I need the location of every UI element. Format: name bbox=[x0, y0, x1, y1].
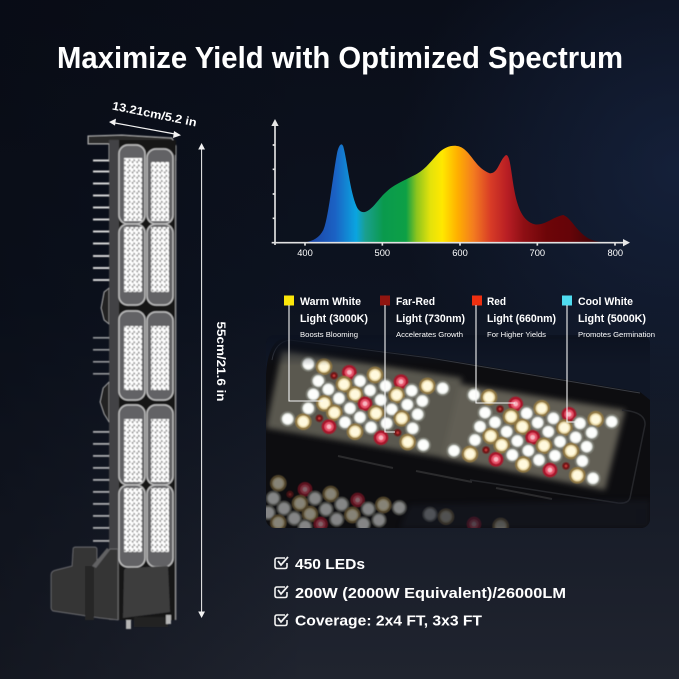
photo fade bbox=[272, 335, 648, 365]
dark chassis bbox=[119, 140, 176, 620]
lamp segments bbox=[119, 145, 173, 567]
legend: warm white bbox=[284, 296, 368, 401]
lower housing grooves bbox=[338, 456, 552, 499]
photo base bbox=[266, 335, 650, 528]
heat sink fins bbox=[93, 160, 109, 542]
feature list bbox=[275, 557, 566, 630]
LED array module 2 bbox=[446, 387, 619, 486]
spectrum curve bbox=[305, 144, 607, 242]
axis labels: 500 bbox=[375, 248, 390, 258]
legend: cool white: Cool White bbox=[578, 296, 633, 308]
legend: far-red bbox=[380, 296, 465, 432]
axis labels: 400 bbox=[297, 248, 313, 258]
feature: coverage: Coverage: 2x4 FT, 3x3 FT bbox=[295, 614, 482, 630]
legend: red: For Higher Yields bbox=[487, 330, 546, 339]
legend: red: Light (660nm) bbox=[487, 313, 556, 325]
axis labels bbox=[297, 248, 623, 258]
LED array lower module (dim) bbox=[266, 474, 510, 528]
side mount knobs bbox=[100, 288, 109, 422]
module metal plates bbox=[266, 350, 625, 490]
legend: warm white: Warm White bbox=[300, 296, 361, 308]
title: Maximize Yield with Optimized Spectrum bbox=[57, 40, 623, 75]
driver box on chassis bbox=[123, 566, 170, 618]
axes bbox=[272, 126, 625, 246]
height dimension arrow bbox=[198, 143, 205, 618]
power driver housing bbox=[51, 547, 118, 620]
legend: cool white: Promotes Germination bbox=[578, 330, 655, 339]
width dimension arrow bbox=[109, 119, 181, 138]
width dimension label: 13.21cm/5.2 in bbox=[111, 100, 198, 129]
legend: red: Red bbox=[487, 296, 506, 308]
feature: 450 LEDs: 450 LEDs bbox=[295, 557, 365, 573]
top bracket bbox=[88, 135, 176, 160]
fixture housing edge bbox=[266, 346, 650, 400]
spectrum chart bbox=[271, 119, 630, 258]
axis labels: 600 bbox=[452, 248, 468, 258]
height dimension label: 55cm/21.6 in bbox=[214, 322, 227, 402]
LED array module 1 bbox=[280, 356, 450, 453]
legend: cool white bbox=[562, 296, 655, 422]
LED close-up photo bbox=[261, 335, 650, 534]
legend: far-red: Light (730nm) bbox=[396, 313, 465, 325]
legend: warm white: Boosts Blooming bbox=[300, 330, 358, 339]
legend: far-red: Far-Red bbox=[396, 296, 435, 308]
axis labels: 800 bbox=[608, 248, 623, 258]
spine bbox=[109, 140, 119, 620]
legend: cool white: Light (5000K) bbox=[578, 313, 646, 325]
feature: power: 200W (2000W Equivalent)/26000LM bbox=[295, 586, 566, 602]
axis labels: 700 bbox=[530, 248, 545, 258]
legend: red bbox=[472, 296, 556, 403]
grow light fixture bbox=[51, 135, 176, 629]
legend: warm white: Light (3000K) bbox=[300, 313, 368, 325]
legend: far-red: Accelerates Growth bbox=[396, 330, 463, 339]
